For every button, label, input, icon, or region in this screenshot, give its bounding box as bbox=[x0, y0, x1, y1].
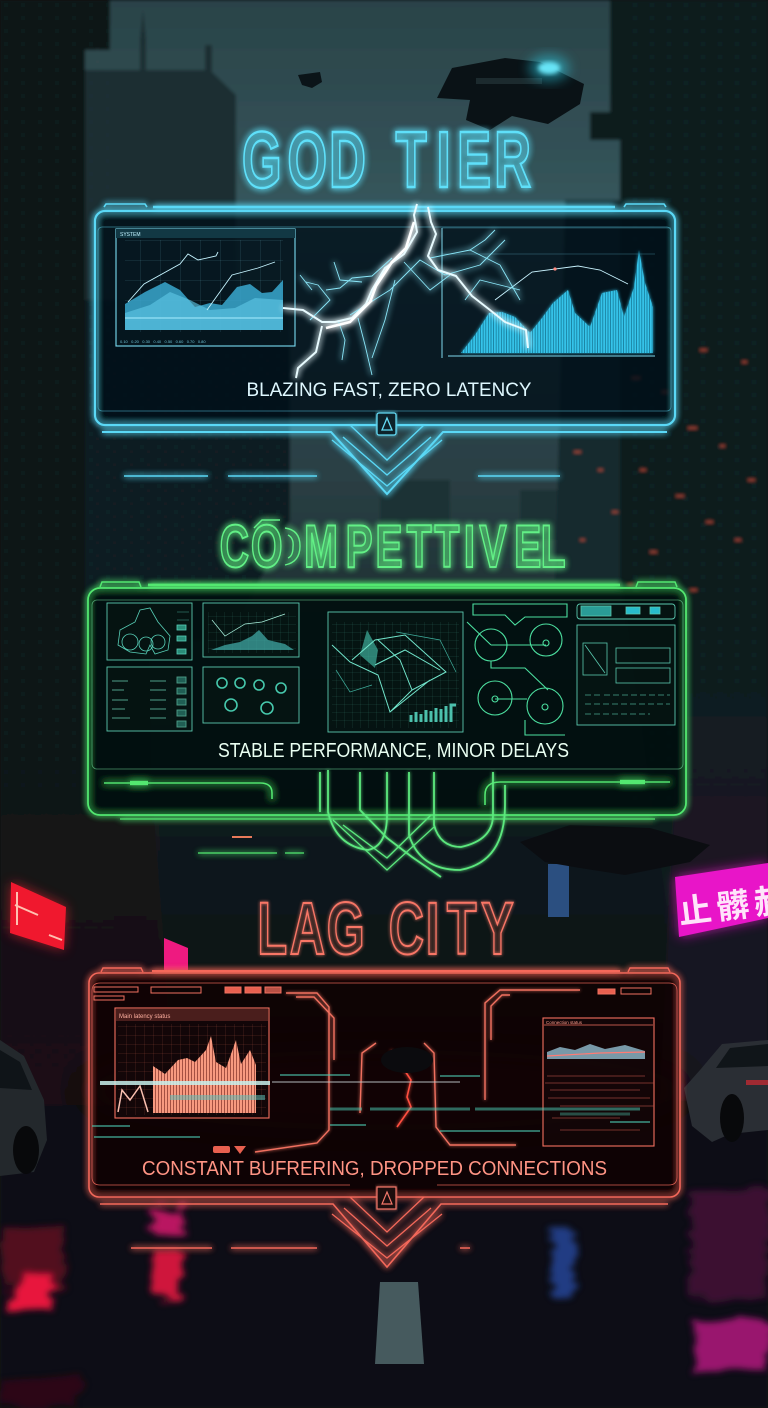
sign: small pink bbox=[164, 938, 188, 970]
tier: competitive bbox=[88, 513, 686, 877]
distant car bbox=[298, 1047, 436, 1073]
panel: god tier frame bbox=[95, 204, 675, 494]
heading: lag city: LAG CITY bbox=[257, 888, 674, 971]
heading: competitive: COMPETTIVEL bbox=[220, 513, 566, 580]
inner frame bbox=[98, 227, 671, 411]
signal bar chart: Main latency status bbox=[119, 1014, 170, 1020]
caption: BLAZING FAST, ZERO LATENCY bbox=[246, 379, 532, 401]
caption: CONSTANT BUFRERING, DROPPED CONNECTIONS bbox=[142, 1158, 607, 1180]
sign: red storefront bbox=[10, 882, 66, 950]
lightning bbox=[283, 204, 528, 378]
bar chart bbox=[442, 228, 671, 358]
monitor: network map bbox=[332, 622, 459, 728]
warning icons bbox=[213, 1146, 246, 1154]
monitor: list bbox=[112, 677, 186, 727]
icon: triangle badge bbox=[377, 413, 396, 435]
small drone bbox=[298, 72, 322, 88]
icon: triangle badge bbox=[377, 1187, 396, 1209]
area chart bbox=[116, 229, 295, 346]
glitch streaks bbox=[92, 1075, 650, 1137]
panel: lag city frame bbox=[89, 968, 680, 1267]
inner frame bbox=[92, 983, 677, 1185]
parked car left bbox=[0, 1040, 47, 1176]
corrupted monitor: Connection status bbox=[546, 1020, 583, 1025]
caption: STABLE PERFORMANCE, MINOR DELAYS bbox=[218, 740, 569, 762]
parked car right bbox=[684, 1040, 768, 1142]
heading: god tier: GOD TIER bbox=[242, 116, 654, 205]
hud brackets bbox=[255, 990, 580, 1152]
monitor: cluster icons bbox=[217, 678, 286, 714]
road marking bbox=[375, 1282, 424, 1364]
monitor: area plot bbox=[208, 612, 296, 653]
corrupted monitor bbox=[543, 1018, 654, 1146]
dashboard: monitors bbox=[107, 603, 675, 732]
street reflections bbox=[0, 1190, 768, 1408]
flying vehicle top right bbox=[437, 55, 584, 130]
tier: lag city bbox=[89, 888, 680, 1267]
circuit diagram bbox=[467, 604, 567, 735]
tier: god tier bbox=[95, 116, 675, 494]
monitor: settings bbox=[581, 606, 670, 714]
hud tabs bbox=[94, 987, 651, 1000]
pipes bbox=[320, 770, 505, 877]
area chart: 0.10 0.20 0.30 0.40 0.50 0.60 0.70 0.80 bbox=[120, 339, 206, 344]
area chart: SYSTEM bbox=[120, 232, 141, 238]
sign: vertical blue bbox=[548, 864, 569, 917]
signal bar chart bbox=[100, 1008, 270, 1118]
flying vehicle mid right bbox=[520, 825, 710, 875]
monitor: anatomy plot bbox=[118, 608, 189, 654]
orange tick bbox=[232, 836, 252, 838]
inner frame bbox=[92, 600, 683, 769]
panel: competitive frame bbox=[88, 582, 686, 853]
